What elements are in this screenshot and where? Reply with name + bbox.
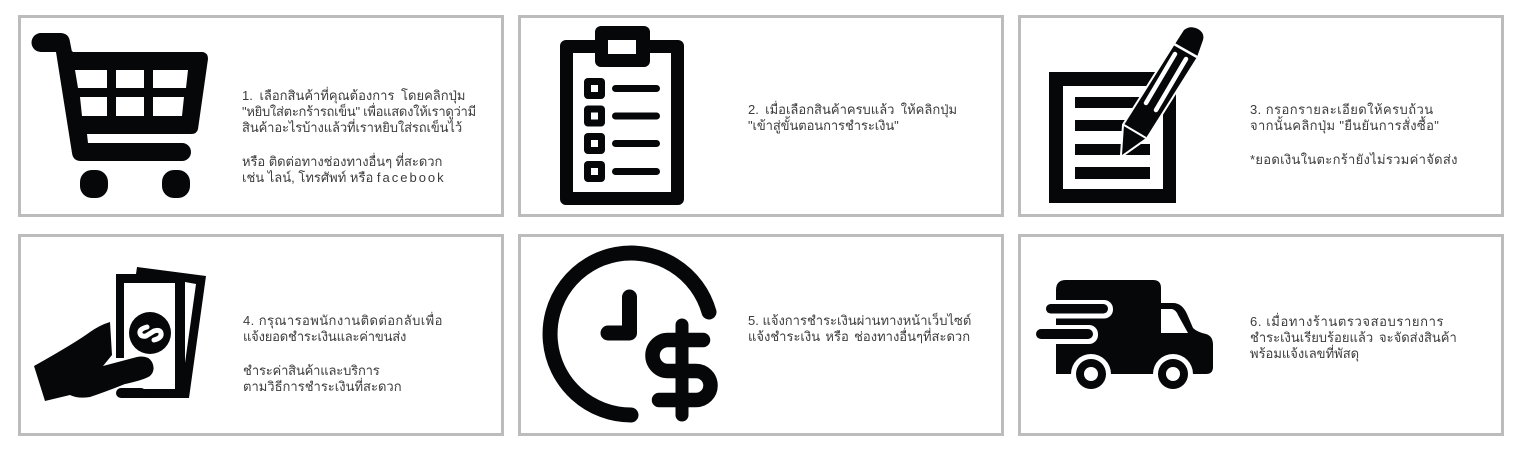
text: step 4 instructions: แจ้งยอดชำระเงินและค่าขนส่ง — [243, 329, 406, 344]
text: step 1 instructions: "หยิบใส่ตะกร้ารถเข็น" เพื่อแสดงให้เราดูว่ามี — [242, 104, 476, 119]
panel: step 6 shipping — [1018, 234, 1504, 436]
text: step 6 instructions: ชำระเงินเรียบร้อยแล้ว จะจัดส่งสินค้า — [1250, 330, 1457, 345]
text: step 4 instructions: ชำระค่าสินค้าและบริการ — [243, 363, 380, 378]
text: step 6 instructions — [1250, 312, 1457, 362]
panel: step 3 fill in details — [1018, 15, 1504, 217]
panel: step 1 choose products — [18, 15, 504, 217]
panel: step 2 proceed to payment — [518, 15, 1004, 217]
text: step 4 instructions: ตามวิธีการชำระเงินที่สะดวก — [243, 379, 402, 394]
text: step 1 instructions: 1. เลือกสินค้าที่คุณต้องการ โดยคลิกปุ่ม — [242, 88, 465, 103]
text: step 3 instructions: 3. กรอกรายละเอียดให้ครบถ้วน — [1250, 102, 1434, 117]
panel: step 4 pay — [18, 234, 504, 436]
text: step 6 instructions: 6. เมื่อทางร้านตรวจสอบรายการ — [1250, 314, 1444, 329]
text: step 3 instructions: จากนั้นคลิกปุ่ม "ยืนยันการสั่งซื้อ" — [1250, 118, 1439, 133]
text: step 1 instructions: เช่น ไลน์, โทรศัพท์ หรือ facebook — [242, 170, 446, 185]
icon: clipboard checklist — [560, 26, 684, 205]
icon: form with pencil — [1049, 27, 1204, 203]
panel: step 5 notify payment — [518, 234, 1004, 436]
text: step 4 instructions — [243, 312, 443, 394]
text: step 1 instructions: สินค้าอะไรบ้างแล้วที่เราหยิบใส่รถเข็นไว้ — [242, 120, 462, 135]
text: step 6 instructions: พร้อมแจ้งเลขที่พัสดุ — [1250, 346, 1359, 361]
text: step 2 instructions: "เข้าสู่ขั้นตอนการชำระเงิน" — [748, 118, 899, 132]
text: step 5 instructions: แจ้งชำระเงิน หรือ ช่องทางอื่นๆที่สะดวก — [748, 329, 970, 344]
text: step 1 instructions: หรือ ติดต่อทางช่องทางอื่นๆ ที่สะดวก — [242, 154, 442, 169]
icon: hand holding money — [34, 267, 206, 401]
text: step 4 instructions: 4. กรุณารอพนักงานติดต่อกลับเพื่อ — [243, 313, 443, 328]
icon: delivery truck — [1036, 280, 1213, 389]
text: step 3 instructions: *ยอดเงินในตะกร้ายังไม่รวมค่าจัดส่ง — [1250, 152, 1458, 167]
text: step 3 instructions — [1250, 102, 1458, 167]
icon: shopping cart — [32, 33, 208, 198]
text: step 1 instructions — [242, 86, 476, 185]
text: step 5 instructions — [748, 312, 971, 344]
text: step 2 instructions: 2. เมื่อเลือกสินค้าครบแล้ว ให้คลิกปุ่ม — [748, 102, 957, 117]
icon: clock with dollar sign — [542, 246, 718, 422]
text: step 5 instructions: 5. แจ้งการชำระเงินผ่านทางหน้าเว็บไซต์ — [748, 313, 971, 328]
text: step 2 instructions — [748, 100, 957, 134]
